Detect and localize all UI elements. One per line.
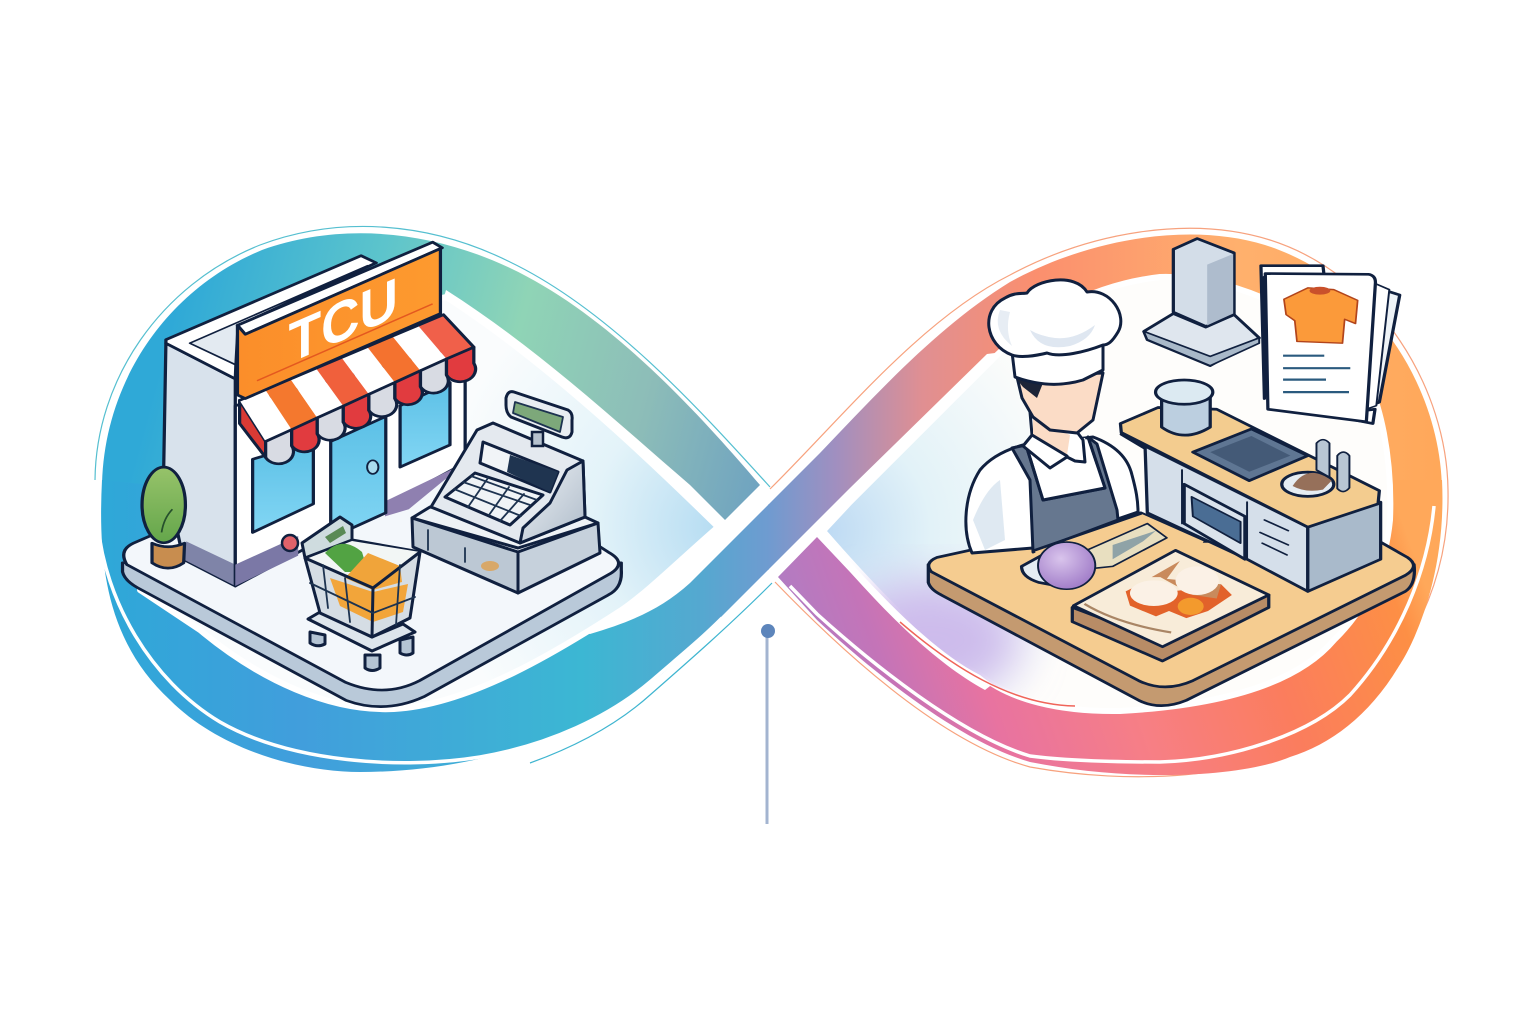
icon: cooking pot bbox=[1156, 380, 1213, 435]
icon: potted plant bbox=[142, 467, 185, 568]
infinity ribbon bbox=[95, 226, 1448, 777]
right loop band bbox=[768, 228, 1448, 777]
kitchen details bbox=[1022, 239, 1400, 661]
icon: cooktop bbox=[1193, 429, 1308, 481]
sign text: TCU bbox=[289, 266, 398, 376]
awning bbox=[240, 315, 476, 464]
storefront building bbox=[164, 256, 465, 586]
recipe papers bbox=[1261, 266, 1400, 424]
store sign bbox=[237, 242, 442, 399]
icon: prep ingredients bbox=[1022, 524, 1167, 589]
cutting board with food bbox=[1072, 550, 1269, 661]
kitchen platform bbox=[928, 407, 1414, 706]
icon: shopping cart bbox=[282, 517, 420, 670]
icon: cash register bbox=[412, 392, 600, 593]
retail store scene bbox=[123, 242, 621, 707]
left loop band bbox=[95, 226, 772, 772]
icon: plate and bottles bbox=[1282, 440, 1349, 496]
connector pin bbox=[761, 624, 775, 824]
range hood bbox=[1144, 239, 1259, 366]
kitchen counter bbox=[1120, 407, 1381, 591]
chef figure bbox=[966, 280, 1138, 553]
wood counter front bbox=[1035, 514, 1204, 595]
store platform bbox=[123, 470, 621, 707]
